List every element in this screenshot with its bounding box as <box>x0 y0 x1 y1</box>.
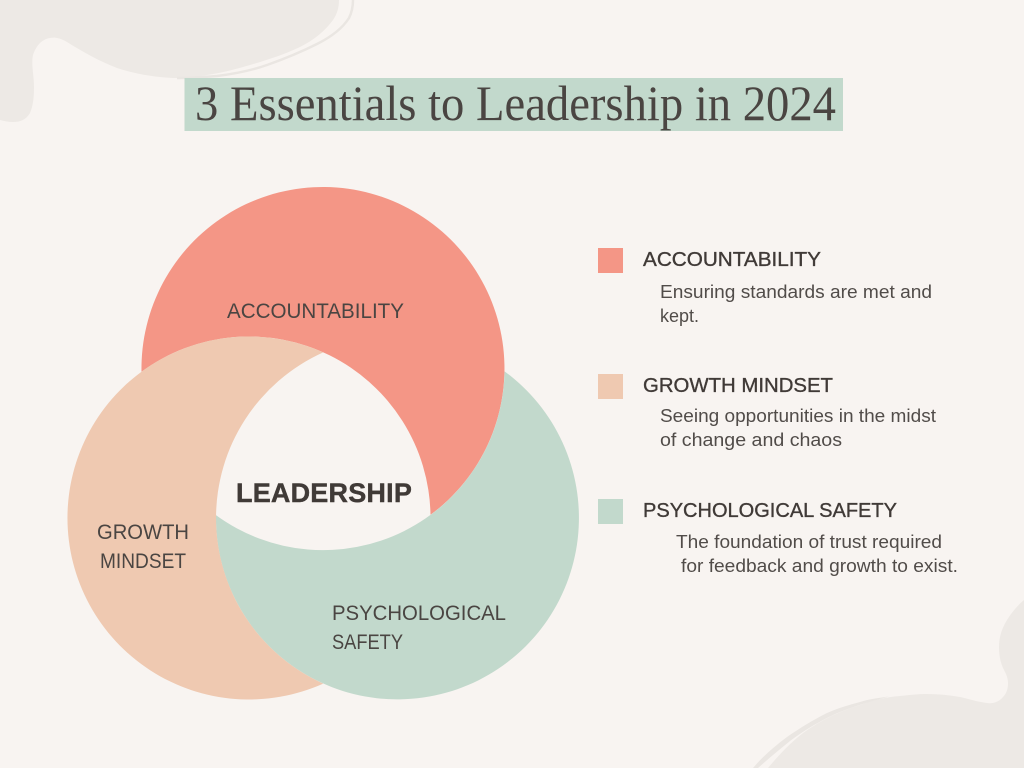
decorative blob: bottom right <box>753 600 1024 768</box>
description: growth mindset <box>660 406 936 450</box>
heading: psychological safety: PSYCHOLOGICAL SAFETY <box>643 500 897 522</box>
decorative blob: top left <box>0 0 353 122</box>
venn label: growth mindset: GROWTH <box>97 521 189 544</box>
heading: accountability: ACCOUNTABILITY <box>643 249 821 271</box>
circle: psychological safety <box>216 371 579 699</box>
legend: accountability <box>598 248 932 326</box>
description: accountability <box>660 282 932 326</box>
venn label: accountability: ACCOUNTABILITY <box>227 300 404 323</box>
center label: leadership: LEADERSHIP <box>236 478 412 508</box>
venn diagram <box>67 187 579 699</box>
title: 3 Essentials to Leadership in 2024 <box>195 75 836 131</box>
description: psychological safety: The foundation of trust required <box>676 532 942 552</box>
swatch: red <box>598 248 623 273</box>
heading: growth mindset: GROWTH MINDSET <box>643 375 833 397</box>
legend: growth mindset <box>598 374 936 450</box>
swatch: peach <box>598 374 623 399</box>
description: growth mindset: of change and chaos <box>660 430 842 450</box>
venn label: psychological safety: SAFETY <box>332 631 403 654</box>
circle: accountability <box>141 187 504 515</box>
venn label: psychological safety <box>332 602 506 654</box>
description: accountability: kept. <box>660 306 699 326</box>
venn label: psychological safety: PSYCHOLOGICAL <box>332 602 506 625</box>
venn label: growth mindset: MINDSET <box>100 550 186 573</box>
legend: psychological safety <box>598 499 958 576</box>
description: psychological safety <box>676 532 958 576</box>
venn label: growth mindset <box>97 521 189 573</box>
circle: growth mindset <box>67 336 323 699</box>
description: accountability: Ensuring standards are met and <box>660 282 932 302</box>
description: growth mindset: Seeing opportunities in the midst <box>660 406 936 426</box>
description: psychological safety: for feedback and growth to exist. <box>681 556 958 576</box>
swatch: green <box>598 499 623 524</box>
